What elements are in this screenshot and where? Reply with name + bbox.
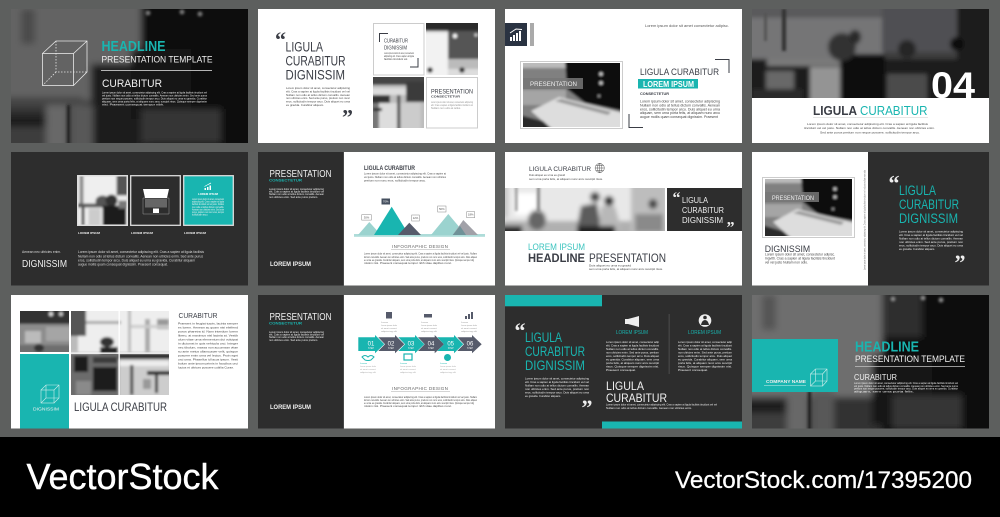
bottom heading: Nullam non odio at tellus dictum convallis. Aenean non ultricies enim.: [606, 406, 692, 410]
step arrows: 04: [428, 342, 435, 348]
caption: Ingvitti. Cras a sapien at ligula facilisis tincidunt: [765, 257, 835, 261]
quote paragraph: [286, 86, 350, 107]
side text: in dictumst in quis vehicula orci. Integer: [178, 342, 238, 346]
side text: su ante metus ullamcorper velit, quisque: [178, 350, 238, 354]
framed photo with label: [762, 176, 855, 239]
slide 3: photo with text: [505, 9, 742, 143]
bottom step icons: Lorem ipsum dolor: [400, 366, 416, 368]
teal text tile: Lorem ipsum dolor sit amet, consectetur: [192, 197, 224, 201]
bottom step icons: adipiscing elit: [360, 371, 377, 374]
subheading and text: vel justo. Nullam non odio at tellus dictum convallis. Aenean non ultricies enim. Sed ante purus: [854, 384, 958, 388]
side text: nec tibulum, massa non accumsan vitae: [178, 346, 238, 350]
quote column: eros, sollicitudin tempor arcu. Duis aliquet eu urna: [525, 390, 589, 394]
sidebar heading: Nullam non odio at tellus dictum convallis. Aenean: [269, 192, 324, 196]
paragraph: Lorem ipsum dolor sit amet, consectetur adipiscing elit. Cras a sapien at ligula facilisis: [807, 122, 928, 126]
image url: VectorStock.com/17395200: [675, 467, 972, 494]
column: megaphone: [606, 316, 659, 372]
teal text tile: LOREM IPSUM: [198, 192, 219, 196]
column: megaphone: non ultricies enim. Sed ante purus, pretium: [606, 350, 659, 354]
caption: Lorem ipsum dolor sit amet, consectetur adipisc.: [765, 253, 835, 257]
text block: Nullam non odio at tellus dictum convallis. Aenean: [640, 103, 720, 107]
icon: wireframe cube: [42, 41, 87, 86]
quote paragraph: Lorem ipsum dolor sit amet, consectetur adipiscing: [286, 86, 350, 90]
side text: ex lorem. Aenean ac quam nisi eleifend: [178, 326, 238, 330]
subheading and text: [854, 373, 958, 393]
column: people: Nullam non odio at tellus dictum convallis.: [678, 347, 732, 351]
side heading: [22, 250, 67, 270]
headline: [855, 338, 965, 364]
dark quote panel: LIGULA: [899, 183, 936, 198]
infographic caption: eu urna eu gravida. Curabitur aliquam, sem urna porta felis, at aliquam nunc arcu suscipit risus. Quisque semper dig: [364, 258, 474, 262]
paragraph: [78, 250, 204, 267]
dark quote panel: eros, sollicitudin tempor arcu. Duis aliquet eu urna: [899, 244, 963, 248]
slide 1: dark photo cover: [3, 1, 256, 151]
top step icons: adipiscing elit: [461, 330, 478, 333]
step arrows: STEP: [428, 348, 434, 350]
column: people: porta felis, at aliquam nunc arcu suscipit: [678, 361, 732, 365]
step arrows: 03: [408, 342, 415, 348]
step arrows: STEP: [408, 348, 414, 350]
infographic caption: INFOGRAPHIC DESIGN: [392, 386, 448, 391]
text block: CONSECTETUR: [640, 92, 670, 96]
teal company panel: COMPANY NAME: [766, 379, 806, 384]
footer bar: [0, 437, 1000, 517]
quote column: DIGNISSIM: [525, 358, 585, 373]
top step icons: sit amet consect: [461, 327, 477, 330]
sidebar heading: Lorem ipsum dolor sit amet, consectetur adipiscing: [269, 187, 324, 191]
sidebar heading: LOREM IPSUM: [270, 261, 311, 268]
teal text tile: facilisis tincidunt vel vel justo. Nullam: [192, 202, 224, 206]
blurred photo background: [11, 9, 248, 143]
step arrows: STEP: [388, 348, 394, 350]
sidebar heading: non ultricies enim. Sed ante purus pretium.: [269, 195, 318, 199]
dark quote box: ”: [726, 220, 734, 236]
top step icons: Lorem ipsum dolor: [461, 325, 477, 327]
icon: growth chart: [505, 23, 534, 46]
bottom step icons: sit amet consect: [440, 368, 456, 371]
framed photo with label: [520, 60, 623, 130]
bottom step icons: Lorem: [360, 363, 367, 365]
quote column: [514, 318, 592, 420]
side text: posuere enim urna vel lectus. Proin eget: [178, 354, 238, 358]
corner brackets: [629, 60, 729, 128]
slide 11: dark quote with two columns: [505, 295, 742, 428]
dark quote panel: CURABITUR: [899, 197, 959, 212]
teal company panel: [752, 339, 838, 392]
chart heading: pretium non nunc eros, sollicitudin tempor arcu.: [364, 178, 426, 182]
heading with globe: [529, 163, 604, 181]
subheading and text: CURABITUR: [854, 373, 897, 382]
step arrows: STEP: [448, 348, 454, 350]
text tile: presentation: Nullam non odio at tellus.: [431, 106, 461, 110]
text tile: presentation: Lorem ipsum dolor sit amet, consectetur adipiscing: [431, 100, 473, 104]
dark quote panel: eu gravida. Curabitur aliquam.: [899, 247, 935, 251]
subheading and text: Lorem ipsum dolor sit amet, consectetur adipiscing elit. Cras a sapien at ligula facilisis tincidunt vel: [102, 90, 207, 94]
subheading and text: CURABITUR: [102, 78, 162, 90]
photo tile bottom left: [373, 77, 424, 128]
teal text tile: sollicitudin arcu.: [192, 213, 208, 217]
bottom step icons: [360, 354, 457, 374]
side text: orci urna. Phasellus id lacus ipsum. Vesti: [178, 358, 238, 362]
column: megaphone: eu gravida. Curabitur aliquam, sem urna: [606, 358, 659, 362]
sidebar heading: [269, 169, 332, 268]
sidebar text: [269, 312, 332, 411]
paragraph: tincidunt vel vel justo. Nullam non odio at tellus dictum convallis. Aenean non ultricies enim.: [804, 126, 935, 130]
bottom step icons: Lorem ipsum dolor: [360, 366, 376, 368]
infographic caption: nissim nisi. Praesent consequat tempor nibh vitae dapibus nunc.: [364, 404, 452, 408]
column: megaphone: elit. Cras a sapien at ligula facilisis tincidunt: [606, 344, 659, 348]
quote heading: LIGULA: [286, 40, 323, 55]
paragraph: augue mollis quam consequat dignissim. Praesent consequat.: [78, 263, 168, 267]
headline: PRESENTATION TEMPLATE: [855, 354, 965, 364]
sidebar heading: PRESENTATION: [270, 169, 332, 180]
headline text: HEADLINE: [528, 251, 585, 265]
text tile: curabitur dignissim: DIGNISSIM: [384, 46, 407, 52]
top step icons: sit amet consect: [421, 327, 437, 330]
text tile: curabitur dignissim: [374, 24, 424, 75]
headline text: LOREM IPSUM: [528, 242, 585, 253]
side text: purus pharetra id. Nam interdum lorem: [178, 330, 238, 334]
headline text: PRESENTATION: [589, 251, 666, 265]
dark quote panel: ”: [954, 250, 966, 275]
subheading and text: pretium non neque posuere, sollicitudin tempor arcu. Duis aliquet eu urna eu gravida. Curabitur: [854, 387, 958, 391]
dark quote panel: Lorem ipsum dolor sit amet, consectetur adipiscing: [899, 230, 963, 234]
slide 6: mountain infographic: [258, 152, 495, 286]
column: people: LOREM IPSUM: [688, 330, 721, 336]
sidebar text: non ultricies enim. Sed ante purus pretium.: [269, 338, 318, 342]
caption: DIGNISSIM: [765, 244, 810, 255]
headline: [102, 38, 212, 64]
caption: [765, 244, 835, 265]
divider: [668, 314, 670, 374]
column: megaphone: Nullam non odio at tellus dictum convallis.: [606, 347, 659, 351]
step arrows: 06: [467, 342, 474, 348]
sidebar text: Lorem ipsum dolor sit amet, consectetur adipiscing: [269, 330, 324, 334]
dark quote box: “: [672, 190, 680, 207]
photo small: [20, 311, 69, 352]
quote column: CURABITUR: [525, 344, 585, 359]
dark quote box: DIGNISSIM: [682, 215, 723, 225]
chart heading: vel justo. Nullam non odio at tellus dictum convallis. Aenean non ultricies: [364, 175, 446, 179]
headline: PRESENTATION TEMPLATE: [102, 54, 212, 64]
blurred photo band: [752, 9, 989, 98]
heading with globe: LIGULA CURABITUR: [529, 166, 591, 173]
slide 8: photo and dark quote panel: [752, 152, 989, 286]
top step icons: Lorem: [461, 322, 468, 324]
quote column: non ultricies enim. Sed ante purus, pretium non: [525, 387, 589, 391]
teal panel with cube: [20, 354, 69, 428]
subheading and text: [102, 78, 207, 106]
infographic caption: INFOGRAPHIC DESIGN: [392, 244, 448, 249]
paragraph: eros, sollicitudin tempor arcu. Duis aliquet eu urna eu gravida. Curabitur aliquam: [78, 259, 195, 263]
quote heading: DIGNISSIM: [286, 68, 345, 83]
dark quote box: [667, 188, 742, 236]
dark quote panel: “: [888, 170, 900, 196]
sidebar heading: CONSECTETUR: [269, 178, 302, 182]
side heading: Aenean nec ultricies enim.: [22, 250, 61, 254]
sidebar heading: elit. Cras a sapien at ligula facilisis tincidunt vel: [269, 190, 324, 194]
quote heading: [275, 27, 353, 130]
slide 12: photo closing slide: [744, 287, 997, 437]
callouts: 12%: [413, 216, 419, 220]
framed photo with label: PRESENTATION: [530, 81, 577, 88]
tile captions: LOREM IPSUM: [184, 231, 207, 235]
paragraph: Nullam non odio at tellus dictum convallis. Aenean non ultricies enim. Sed ante purus: [78, 254, 203, 258]
quote column: Nullam non odio at tellus dictum convallis. Aenean: [525, 384, 589, 388]
column: people: Lorem ipsum dolor sit amet, consectetur adip: [678, 340, 732, 344]
bottom step icons: sit amet consect: [360, 368, 376, 371]
bottom heading: [606, 381, 717, 410]
sidebar text: elit. Cras a sapien at ligula facilisis tincidunt vel: [269, 333, 324, 337]
infographic caption: dictum convallis. Aenean non ultricies enim. Sed ante purus, pretium non nunc eros, sollicitudin tempor arcu. Duis aliquet: [364, 398, 477, 402]
teal panel with cube: DIGNISSIM: [33, 406, 59, 412]
subheading and text: pretium non neque posuere, sollicitudin tempor arcu. Duis aliquet eu urna eu gravida. Curabitur: [102, 96, 207, 100]
top step icons: Lorem ipsum dolor: [421, 325, 437, 327]
slide 9: photo collage with text: [11, 295, 248, 428]
top step icons: Lorem: [421, 322, 428, 324]
mountain chart: [354, 198, 485, 237]
column: megaphone: Praesent consequat.: [606, 368, 636, 372]
step arrows: 01: [368, 342, 375, 348]
teal text tile: non odio at tellus dictum convallis.: [192, 205, 224, 209]
dark quote panel: non ultricies enim. Sed ante purus, pretium non: [899, 240, 963, 244]
quote paragraph: non ultricies enim. Sed ante purus, pretium non nunc: [286, 96, 350, 100]
subheading and text: vel justo. Nullam non odio at tellus dictum convallis. Aenean non ultricies enim. Sed ante purus: [102, 94, 207, 98]
blurred photo background: [752, 295, 989, 428]
vertical side text: Lorem ipsum dolor sit amet, consectetur adipiscing elit. Cras a sapien at ligula facilisis tincidunt vel vel justo nullam non odio: [864, 169, 866, 270]
title: CURABITUR: [860, 103, 928, 118]
bottom step icons: Lorem: [440, 363, 447, 365]
text block: aliquam, sem urna porta felis, at aliquam nunc arcu: [640, 111, 720, 115]
side text: [178, 311, 238, 370]
top step icons: adipiscing elit: [381, 330, 398, 333]
text tile: presentation: [426, 78, 478, 128]
photo tile top right: [426, 23, 478, 75]
column: people: Praesent consequat.: [678, 368, 708, 372]
text tile: curabitur dignissim: adipiscing elit. Cras a sapien at ligula: [384, 54, 414, 58]
step arrows: STEP: [368, 348, 374, 350]
side text: CURABITUR: [178, 311, 218, 320]
sidebar text: LOREM IPSUM: [270, 404, 311, 411]
dark quote panel: Nullam non odio at tellus dictum convallis. Aenean: [899, 236, 963, 240]
dark quote box: CURABITUR: [682, 205, 724, 215]
step arrows: 02: [388, 342, 395, 348]
quote paragraph: Nullam non odio at tellus dictum convallis. Aenean: [286, 93, 350, 97]
side text: libero, at maximus nisl lacinia at. Vestib: [178, 334, 238, 338]
dark quote box: LIGULA: [682, 195, 708, 205]
text tile: presentation: PRESENTATION: [431, 90, 473, 96]
bottom heading: LIGULA: [606, 381, 644, 393]
step arrows: 05: [447, 342, 455, 348]
teal text tile: adipiscing elit. Cras a sapien at ligula: [192, 200, 224, 204]
number 04: 04: [931, 65, 975, 106]
text tile: presentation: CONSECTETUR: [431, 94, 461, 98]
title: [813, 103, 928, 118]
column: megaphone: risus. Quisque semper dignissim nisi.: [606, 364, 659, 368]
column: people: [678, 314, 732, 372]
infographic caption: Lorem ipsum dolor sit amet, consectetur adipiscing elit. Cras a sapien at ligula facilisis tincidunt vel vel justo. Nullam: [364, 395, 477, 399]
subheading and text: Lorem ipsum dolor sit amet, consectetur adipiscing elit. Cras a sapien at ligula facilisis tincidunt vel: [854, 381, 958, 385]
sidebar text: PRESENTATION: [270, 312, 332, 323]
slide 2: quote and image grid: [258, 9, 495, 143]
chart heading: [364, 166, 446, 182]
top step icons: sit amet consect: [381, 327, 397, 330]
callouts: 50%: [439, 207, 445, 211]
bottom step icons: Lorem ipsum dolor: [440, 366, 456, 368]
bottom step icons: adipiscing elit: [400, 371, 417, 374]
bottom heading: Lorem ipsum dolor sit amet, consectetur adipiscing elit. Cras a sapien at ligula facilisis tincidunt vel vel: [606, 402, 717, 406]
bottom step icons: sit amet consect: [400, 368, 416, 371]
column: people: elit. Cras a sapien at ligula facilisis tincidunt: [678, 344, 732, 348]
framed photo with label: PRESENTATION: [772, 195, 814, 202]
quote column: “: [514, 318, 526, 343]
top step icons: adipiscing elit: [421, 330, 438, 333]
infographic caption: eu urna eu gravida. Curabitur aliquam, sem urna porta felis, at aliquam nunc arcu suscipit risus. Quisque semper dig: [364, 401, 474, 405]
quote paragraph: eu gravida. Curabitur aliquam.: [286, 103, 324, 107]
chart heading: Lorem ipsum dolor sit amet, consectetur adipiscing elit. Cras a sapien at: [364, 172, 446, 176]
heading with globe: Duis aliquet eu urna eu gravid: [529, 173, 565, 177]
side text: luctus et ultrices posuere cubilia Curae.: [178, 366, 234, 370]
caption: LIGULA CURABITUR: [74, 402, 167, 414]
quote heading: “: [275, 27, 286, 52]
side heading: DIGNISSIM: [22, 258, 67, 270]
infographic caption: [364, 244, 477, 265]
infographic caption: [364, 386, 477, 408]
text tile: curabitur dignissim: Lorem ipsum dolor sit amet, consectetur: [384, 51, 414, 55]
teal text tile: purus, pretium non nunc eros, tempor: [192, 210, 224, 214]
quote paragraph: eros, sollicitudin tempor arcu. Duis aliquet eu urna: [286, 100, 350, 104]
paragraph: [804, 122, 935, 134]
subheading and text: nisi. Praesent consequat tempor nibh.: [102, 102, 164, 106]
dark quote panel: DIGNISSIM: [899, 211, 958, 226]
photo large: [71, 311, 169, 395]
sidebar text: Nullam non odio at tellus dictum convallis. Aenean: [269, 335, 324, 339]
side text: Praesent in feugiat turpis, lacinia semper: [178, 322, 238, 326]
text block: augue mollis quam consequat dignissim. Praesent: [640, 115, 718, 119]
quote column: LIGULA: [525, 330, 562, 345]
text block: [638, 67, 720, 119]
headline: HEADLINE: [855, 338, 919, 356]
photo strip: [505, 188, 665, 231]
quote heading: CURABITUR: [286, 54, 346, 69]
headline text: sem urna porta felis, at aliquam nunc arcu suscipit risus.: [589, 267, 663, 271]
column: people: risus. Quisque semper dignissim nisi.: [678, 364, 732, 368]
infographic caption: nissim nisi. Praesent consequat tempor nibh vitae dapibus nunc.: [364, 261, 452, 265]
icon: wireframe cube: [810, 369, 827, 386]
side text: ulum vitae urna elementum dui volutpat: [178, 338, 238, 342]
quote column: Lorem ipsum dolor sit amet, consectetur adipiscing: [525, 376, 589, 380]
column: megaphone: LOREM IPSUM: [616, 330, 648, 336]
dark quote panel: elit. Cras a sapien at ligula facilisis tincidunt vel vel: [899, 233, 963, 237]
paragraph: Lorem ipsum dolor sit amet, consectetur adipiscing elit. Cras a sapien at ligula facilisis: [78, 250, 204, 254]
column: people: eu gravida. Curabitur aliquam, sem urna: [678, 358, 732, 362]
column: megaphone: porta felis, at aliquam nunc arcu suscipit: [606, 361, 659, 365]
title: LIGULA: [813, 103, 858, 118]
top caption: Lorem ipsum dolor sit amet consectetur adipisc.: [645, 24, 729, 28]
quote column: elit. Cras a sapien at ligula facilisis tincidunt vel vel: [525, 380, 589, 384]
heading with globe: sem urna porta felis, at aliquam nunc arcu suscipit risus.: [529, 177, 603, 181]
text tile: curabitur dignissim: CURABITUR: [384, 38, 408, 44]
icon tile: laptop: [131, 176, 180, 225]
column: people: non ultricies enim. Sed ante purus, pretium: [678, 350, 732, 354]
headline text: Duis aliquet eu urna eu gravid: [589, 264, 631, 268]
text tile: presentation: elit. Cras a sapien at ligula facilisis tincidunt vel: [431, 103, 473, 107]
quote paragraph: elit. Cras a sapien at ligula facilisis tincidunt vel vel: [286, 89, 350, 93]
callouts: 18%: [468, 213, 474, 217]
callouts: 70%: [383, 200, 389, 204]
top step icons: Lorem ipsum dolor: [381, 325, 397, 327]
text block: Lorem ipsum dolor sit amet, consectetur adipiscing: [640, 100, 720, 104]
teal text tile: [184, 176, 233, 225]
caption: vel vel justo Nullam non odio.: [765, 261, 808, 265]
text block: LOREM IPSUM: [643, 80, 694, 89]
sidebar text: CONSECTETUR: [269, 320, 302, 326]
quote column: eu gravida. Curabitur aliquam.: [525, 394, 561, 398]
tile captions: [78, 231, 207, 235]
teal text tile: Aenean non ultricies enim. Sed ante: [192, 207, 224, 211]
bottom heading: CURABITUR: [606, 393, 667, 405]
text block: eros, sollicitudin tempor arcu. Duis aliquet eu urna: [640, 107, 720, 111]
top step icons: Lorem: [381, 322, 388, 324]
dark quote panel: [868, 152, 989, 286]
callouts: 30%: [364, 216, 370, 220]
column: megaphone: eros, sollicitudin tempor arcu. Duis aliquet: [606, 354, 659, 358]
slide 7: headline with photo strip: [500, 152, 742, 286]
side text: bulum ante ipsum primis in faucibus orci: [178, 362, 238, 366]
text block: LIGULA CURABITUR: [640, 67, 719, 78]
text tile: curabitur dignissim: facilisis tincidunt vel.: [384, 57, 408, 61]
tile captions: LOREM IPSUM: [131, 231, 154, 235]
slide 4: photo with number 04: [747, 4, 994, 143]
step arrows: STEP: [467, 348, 473, 350]
bottom step icons: adipiscing elit: [440, 371, 457, 374]
quote heading: ”: [342, 104, 353, 130]
callouts: [362, 198, 475, 221]
headline text: [528, 242, 666, 271]
chart heading: LIGULA CURABITUR: [364, 166, 416, 172]
column: people: eros, sollicitudin tempor arcu. Duis aliquet: [678, 354, 732, 358]
paragraph: Sed ante purus pretium non neque posuere, sollicitudin tempor arcu.: [820, 130, 920, 134]
slide 5: dark slide with three tiles: [11, 152, 248, 286]
quote column: ”: [582, 395, 592, 420]
photo tile: [76, 174, 130, 228]
slide 10: step arrows infographic: [258, 295, 495, 428]
infographic caption: dictum convallis. Aenean non ultricies enim. Sed ante purus, pretium non nunc eros, sollicitudin tempor arcu. Duis aliquet: [364, 255, 477, 259]
subheading and text: aliquam, sem urna porta felis, at aliquam nunc arcu suscipit risus. Quisque semper dignissim: [102, 100, 207, 104]
subheading and text: aliquam, sem urna porta felis.: [854, 389, 914, 393]
step arrows: [358, 335, 482, 353]
top step icons: [381, 312, 478, 333]
brand wordmark: VectorStock: [26, 456, 219, 497]
infographic caption: Lorem ipsum dolor sit amet, consectetur adipiscing elit. Cras a sapien at ligula facilisis tincidunt vel vel justo. Nullam: [364, 252, 477, 256]
column: megaphone: Lorem ipsum dolor sit amet, consectetur adip: [606, 340, 659, 344]
tile captions: LOREM IPSUM: [78, 231, 101, 235]
bottom step icons: Lorem: [400, 363, 407, 365]
headline: HEADLINE: [102, 38, 166, 55]
